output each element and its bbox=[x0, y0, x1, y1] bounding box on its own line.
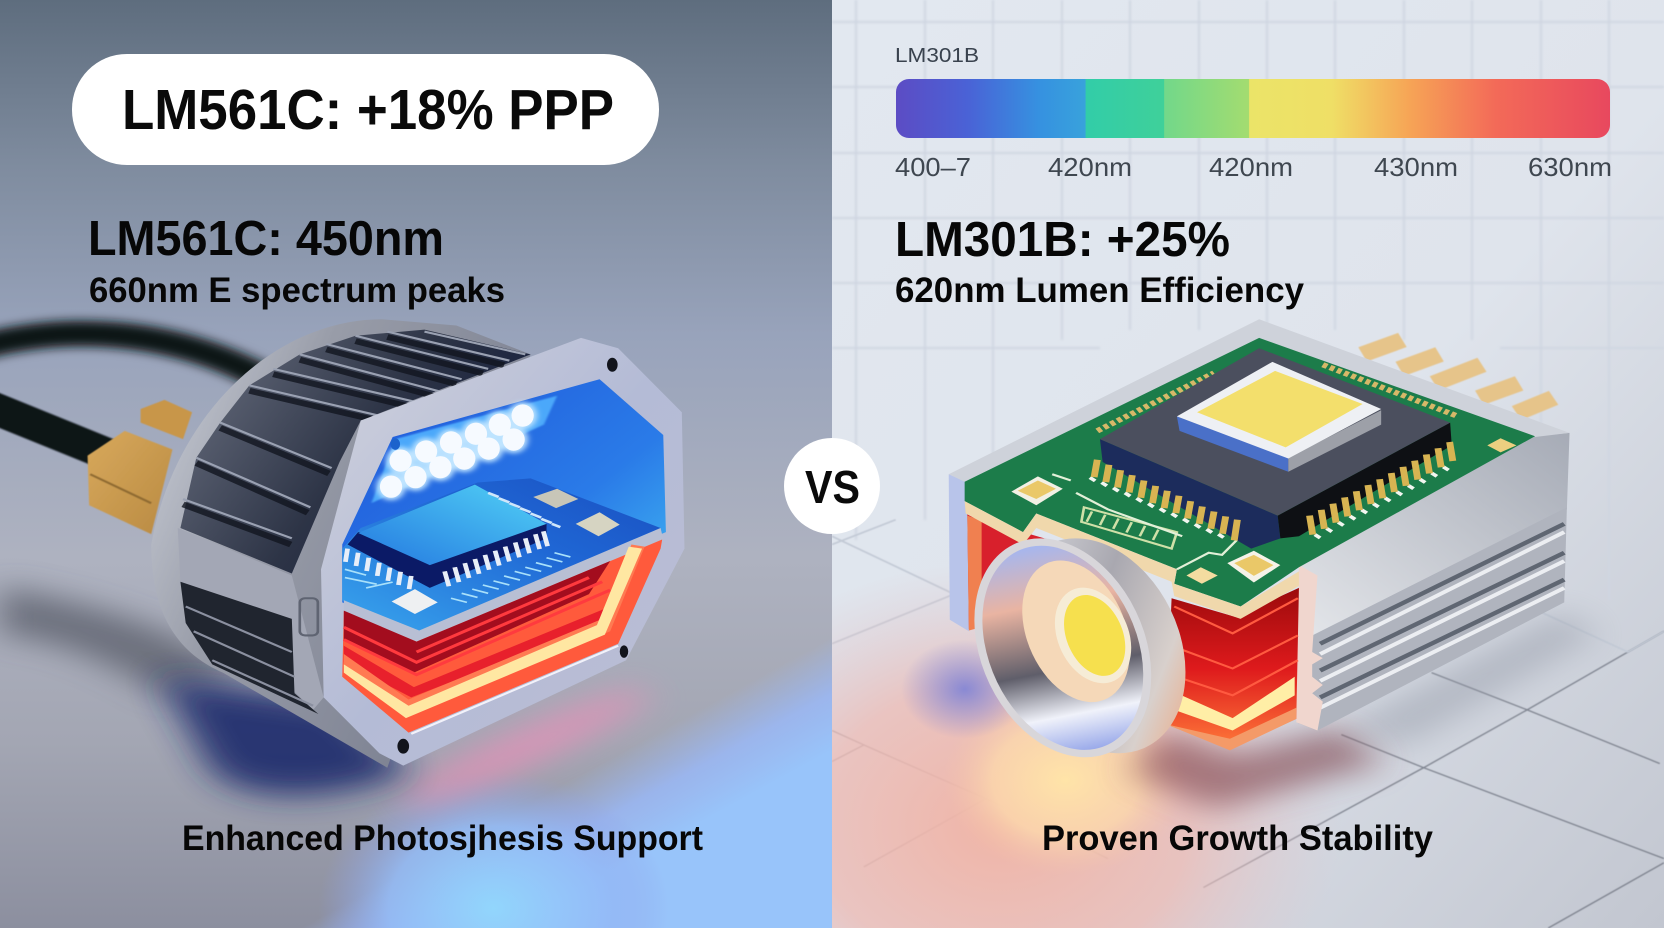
spectrum axis labels: 420nm bbox=[1048, 152, 1132, 182]
icon: gold connector bbox=[88, 400, 192, 534]
left heading text bbox=[88, 212, 505, 310]
icon: black power cables bbox=[0, 334, 265, 454]
VS badge: VS bbox=[805, 461, 860, 513]
VS badge bbox=[784, 438, 880, 534]
panel: LM301B background bbox=[832, 0, 1664, 928]
chip pins bbox=[345, 531, 548, 589]
panel: LM561C background bbox=[0, 0, 832, 928]
heatsink barrel bbox=[151, 319, 531, 768]
chip body bbox=[348, 524, 547, 588]
headline pill bbox=[72, 54, 659, 165]
fin slots bbox=[183, 337, 504, 545]
left heading text: LM561C: 450nm bbox=[88, 212, 444, 266]
spectrum chart bbox=[895, 44, 1612, 182]
right heading text: 620nm Lumen Efficiency bbox=[895, 271, 1305, 310]
left caption: Enhanced Photosjhesis Support bbox=[182, 819, 703, 858]
heatsink upper fins bbox=[180, 330, 531, 573]
floor perspective grid bbox=[832, 631, 1664, 928]
chip gold pins bbox=[1094, 442, 1453, 540]
spectrum title: LM301B bbox=[895, 44, 979, 67]
chip pin white feet bbox=[1090, 467, 1449, 538]
pink light reflection bbox=[390, 676, 661, 818]
spectrum axis labels: 430nm bbox=[1374, 152, 1458, 182]
silver top frame bbox=[949, 319, 1570, 482]
icon: rear gold pins bbox=[1363, 340, 1554, 413]
fin ridge highlights bbox=[183, 332, 525, 538]
lens assembly bbox=[947, 524, 1213, 772]
frame screw holes bbox=[391, 358, 628, 754]
blue light pool on the floor bbox=[297, 631, 832, 928]
board edge shelf bbox=[344, 528, 663, 642]
LED package with yellow phosphor bbox=[1177, 362, 1381, 472]
left red layer block bbox=[967, 514, 1065, 629]
spectrum axis labels: 420nm bbox=[1209, 152, 1293, 182]
spectrum axis labels: 630nm bbox=[1528, 152, 1612, 182]
spectrum axis labels: 400–7 bbox=[895, 152, 971, 182]
right heatsink block bbox=[1296, 433, 1570, 730]
spectrum bar bbox=[896, 79, 1610, 138]
frame bevel highlight bbox=[411, 646, 618, 734]
left heading text: 660nm E spectrum peaks bbox=[89, 271, 505, 310]
right heading text bbox=[895, 213, 1305, 310]
LED array bbox=[371, 396, 557, 503]
octagonal front frame bbox=[321, 338, 684, 766]
black processor chip bbox=[1090, 348, 1453, 549]
trace pattern bbox=[1081, 507, 1177, 549]
LED module LM301B illustration bbox=[947, 319, 1570, 772]
green circuit board bbox=[965, 338, 1535, 619]
heatsink lower fins bbox=[180, 582, 318, 714]
board beige edge bbox=[965, 501, 1299, 619]
red layer stack below the board bbox=[1166, 588, 1299, 750]
gold solder pads bbox=[1011, 476, 1063, 505]
warm lens glow on the floor bbox=[832, 597, 1593, 928]
right heading text: LM301B: +25% bbox=[895, 213, 1230, 267]
solder bead rows bbox=[1097, 365, 1458, 431]
wall grid bbox=[832, 0, 1663, 540]
spectrum axis labels bbox=[895, 152, 1612, 182]
lower chamber: red glowing layers bbox=[342, 540, 662, 733]
upper chamber: blue interior bbox=[342, 379, 666, 635]
right caption: Proven Growth Stability bbox=[1042, 819, 1434, 858]
left side wall bbox=[949, 474, 969, 631]
LED module LM561C illustration bbox=[0, 319, 684, 768]
blue circuit board bbox=[342, 478, 661, 631]
port slot bbox=[300, 598, 318, 635]
SMD components bbox=[533, 489, 578, 508]
headline pill: LM561C: +18% PPP bbox=[122, 78, 614, 142]
module cast shadow bbox=[0, 586, 409, 795]
